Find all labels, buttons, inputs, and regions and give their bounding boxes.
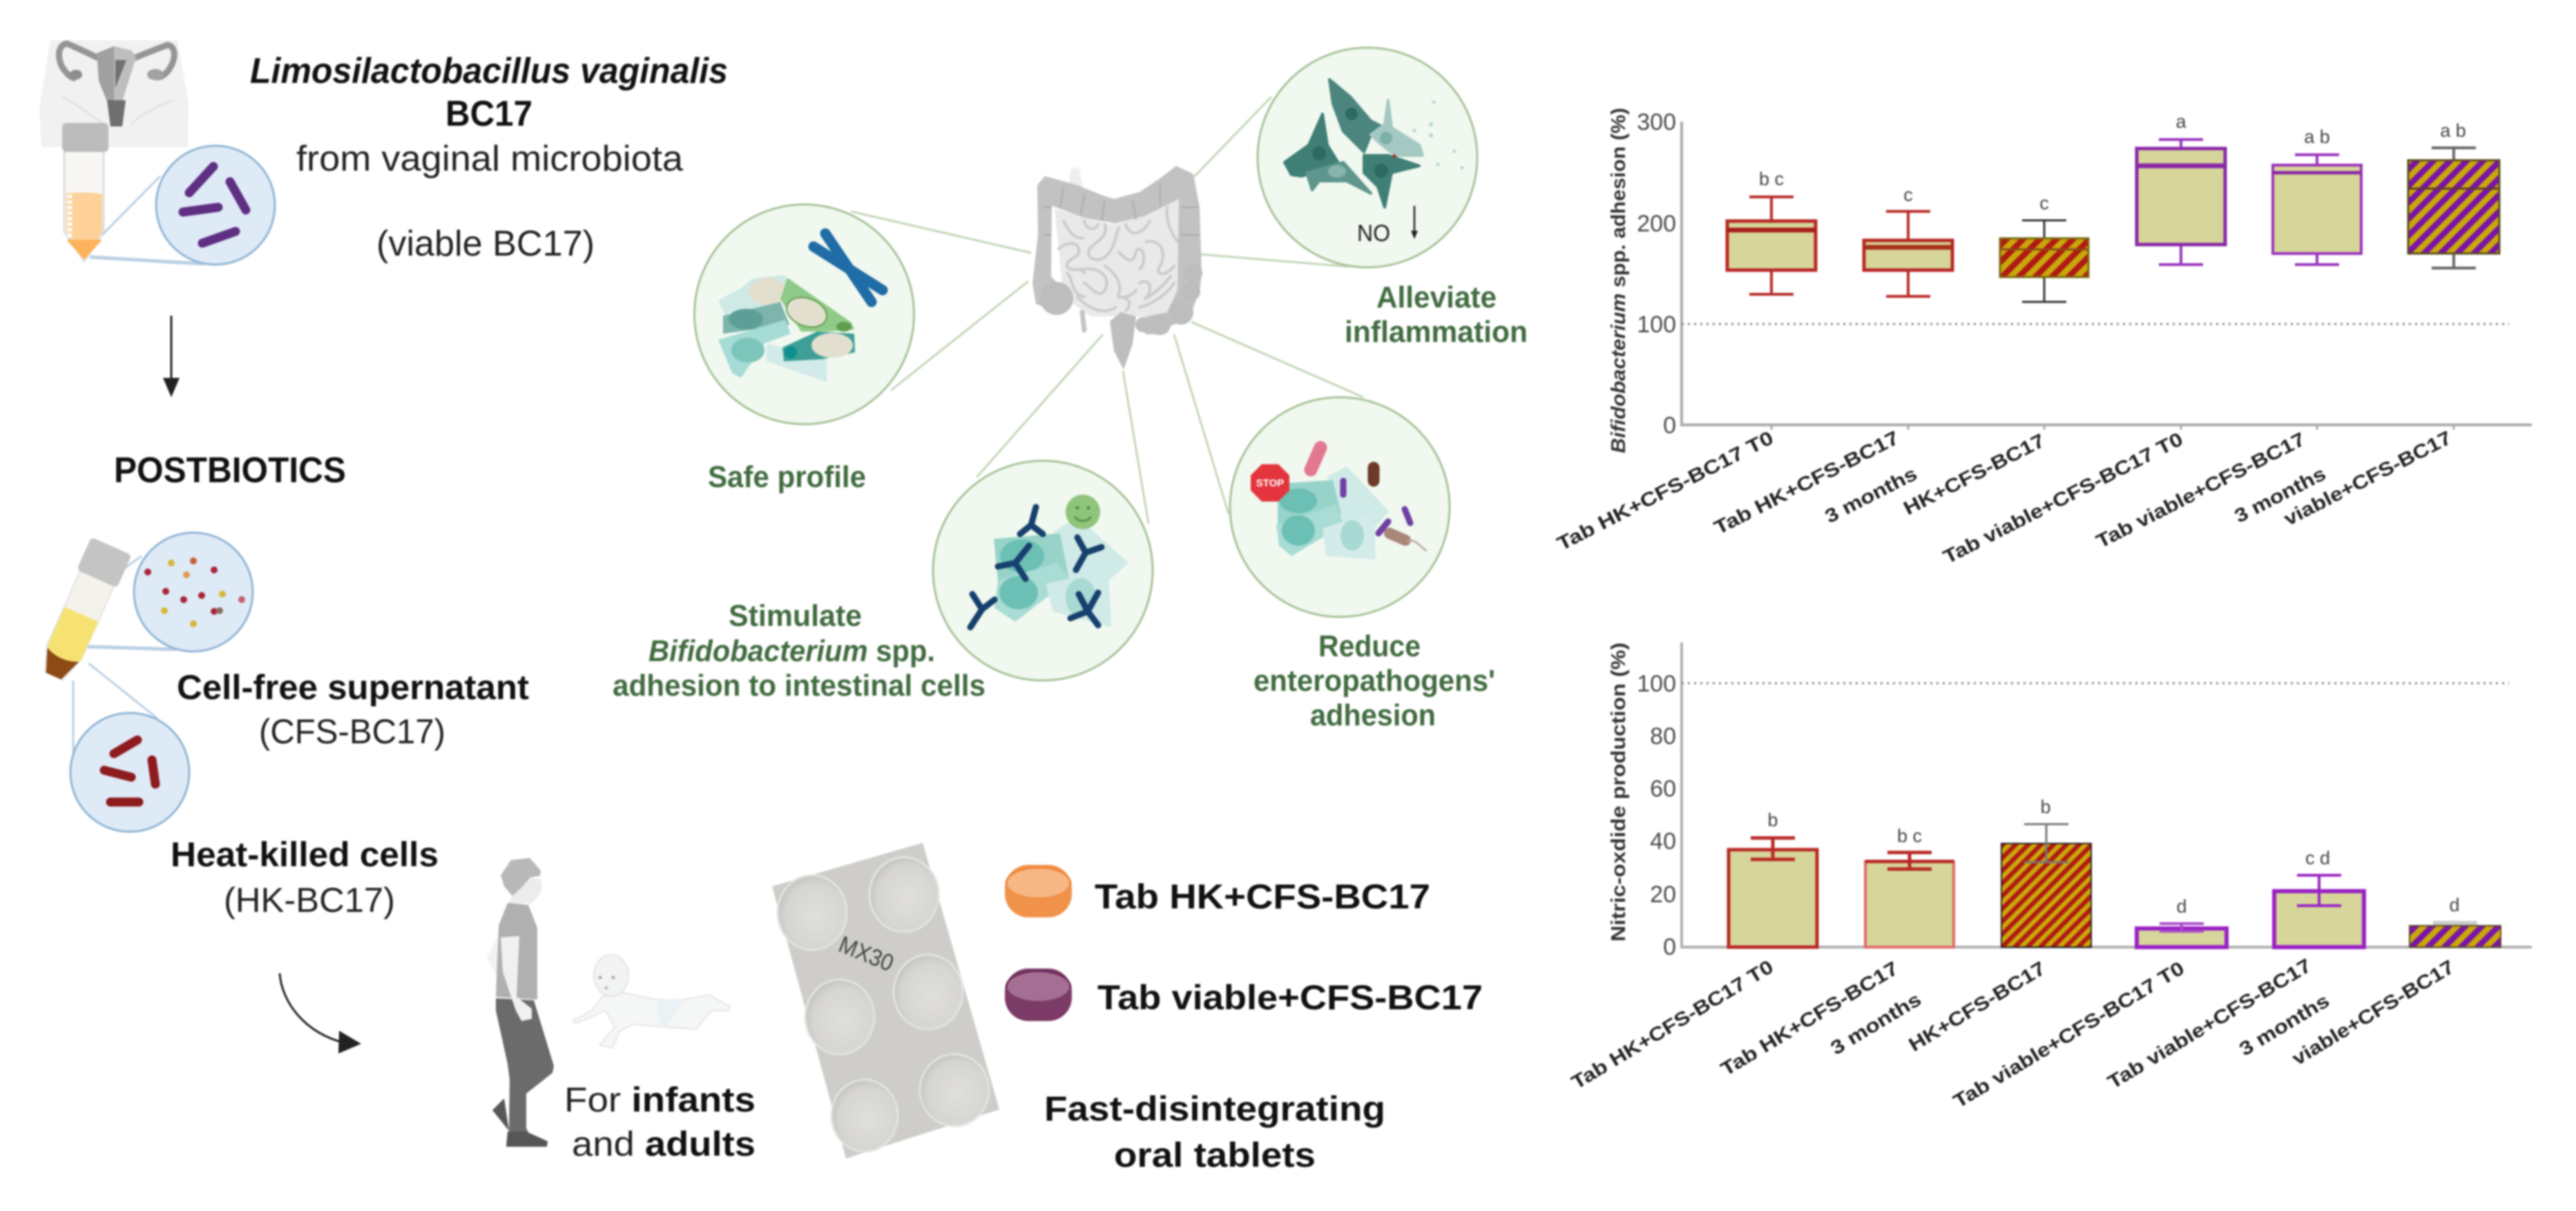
label: reduce enteropathogens adhesion: Reduce [1318,629,1421,663]
significance letters [1767,797,2460,917]
icon: blister pack of tablets [772,843,999,1158]
chart: nitric oxide production bar chart [1568,642,2532,1112]
significance letters: b c [1759,169,1784,189]
significance letters: a [2175,111,2186,132]
panel: safe profile circle [695,204,914,424]
bar: Tab viable+CFS-BC17 T0 [2137,924,2227,947]
significance letters: a b [2440,120,2466,141]
text: cell-free supernatant [177,668,529,751]
x labels: 3 months [2236,990,2333,1060]
legend: Tab HK+CFS-BC17: Tab HK+CFS-BC17 [1095,877,1430,916]
label: safe profile: Safe profile [708,460,866,494]
y axis ticks: 20 [1650,881,1676,908]
text: heat-killed cells [171,835,439,919]
heading: postbiotics: POSTBIOTICS [114,450,346,490]
y axis ticks: 0 [1663,934,1676,960]
title: strain name: BC17 [445,94,532,134]
label: alleviate inflammation [1345,280,1528,349]
bar: Tab HK+CFS-BC17 T0 [1729,838,1817,947]
axes [1682,642,2532,947]
bar: Tab viable+CFS-BC17 3 months [2274,875,2364,947]
significance letters [1759,111,2466,213]
label: reduce enteropathogens adhesion [1253,629,1495,732]
title: strain name: (viable BC17) [376,224,595,264]
label: reduce enteropathogens adhesion: adhesion [1310,698,1436,732]
box: HK+CFS-BC17 [2000,220,2088,302]
icon: stop sign [1251,464,1289,502]
x labels: Tab HK+CFS-BC17 [1717,957,1902,1080]
box: Tab HK+CFS-BC17 T0 [1727,197,1816,294]
bar: Tab HK+CFS-BC17 3 months [1865,852,1954,947]
icon: culture tube orange [62,123,108,261]
y axis ticks: 0 [1663,412,1676,439]
significance letters: b [1767,810,1778,830]
panel: alleviate inflammation circle [1258,48,1477,267]
bar: viable+CFS-BC17 [2410,921,2501,947]
x labels [1568,955,2458,1112]
x labels: Tab viable+CFS-BC17 [2104,955,2315,1093]
icon: tilted supernatant tube [33,537,132,685]
box: viable+CFS-BC17 [2408,148,2499,268]
box: Tab viable+CFS-BC17 3 months [2273,155,2361,265]
text: for infants and adults: For infants [564,1080,756,1119]
icon: pelvis and uterus [39,40,189,147]
label: stimulate bifidobacterium adhesion: Stimulate [729,599,862,633]
icon: stop sign: STOP [1256,477,1284,489]
label: stimulate bifidobacterium adhesion: adhesion to intestinal cells [613,669,986,703]
box: Tab viable+CFS-BC17 T0 [2137,140,2225,265]
box: Tab HK+CFS-BC17 3 months [1864,211,1952,296]
icon: cells [994,517,1128,627]
icon: baby crawling [573,955,730,1048]
icon: smiling bacterium [1066,495,1100,529]
panel: stimulate bifidobacterium circle [933,461,1153,680]
arrow: down to postbiotics [163,316,180,397]
y axis ticks: 60 [1650,776,1676,802]
icon: adult walking [487,858,554,1147]
icon: chromosome [814,233,883,302]
x labels: HK+CFS-BC17 [1900,430,2048,519]
text: cell-free supernatant: Cell-free supernatant [177,668,529,707]
x labels: Tab HK+CFS-BC17 T0 [1568,956,1777,1094]
significance letters: c [1903,184,1913,205]
x labels: Tab viable+CFS-BC17 T0 [1950,957,2188,1112]
icon: magnifier cell-free supernatant [86,533,253,651]
x labels: Tab viable+CFS-BC17 [2093,428,2309,552]
bar: HK+CFS-BC17 [2001,824,2091,947]
icon: magnifier heat-killed cells [70,663,189,832]
icon: intestine [1032,166,1202,370]
y axis ticks: 300 [1637,109,1676,135]
x labels: Tab HK+CFS-BC17 T0 [1553,427,1777,555]
icon: purple tablet [1005,969,1072,1021]
text: NO decrease: NO [1357,220,1390,247]
x labels: viable+CFS-BC17 [2280,427,2455,530]
x labels: HK+CFS-BC17 [1905,957,2049,1056]
label: reduce enteropathogens adhesion: enteropathogens' [1253,664,1495,698]
significance letters: b [2040,797,2051,817]
icon: macrophage cells [1285,79,1423,207]
significance letters: b c [1897,826,1922,846]
chart: bifidobacterium adhesion box plot [1553,108,2532,568]
y axis ticks [1637,671,1676,960]
significance letters: a b [2304,126,2330,147]
text: cell-free supernatant: (CFS-BC17) [259,712,445,751]
y axis ticks: 200 [1637,211,1676,237]
x labels: Tab HK+CFS-BC17 [1711,427,1903,539]
icon: pathogens [1311,448,1426,551]
label: alleviate inflammation: Alleviate [1376,280,1497,314]
y axis ticks: 40 [1650,828,1676,855]
significance letters: d [2449,895,2460,915]
text: heat-killed cells: (HK-BC17) [224,881,395,919]
y axis title: Bifidobacterium spp. adhesion (%) [1608,108,1630,453]
arrow: NO down [1411,206,1418,239]
text: heat-killed cells: Heat-killed cells [171,835,439,874]
x labels: 3 months [1821,463,1921,527]
significance letters: c d [2305,848,2330,868]
label: stimulate bifidobacterium adhesion [613,599,986,703]
text: fast-disintegrating oral tablets: oral tablets [1114,1136,1316,1174]
x labels: viable+CFS-BC17 [2288,956,2458,1069]
panel: reduce enteropathogens circle [1230,397,1450,617]
significance letters: c [2039,193,2049,213]
y axis ticks: 100 [1637,671,1676,697]
y axis title: Nitric-oxdide production (%) [1608,642,1630,942]
y axis ticks: 80 [1650,723,1676,750]
icon: cells [718,275,855,382]
text: fast-disintegrating oral tablets [1044,1089,1385,1174]
text: for infants and adults: and adults [572,1125,756,1163]
title: strain name: from vaginal microbiota [296,139,683,179]
icon: orange tablet [1005,865,1072,917]
icon: blister pack of tablets: MX30 [835,931,897,977]
x labels [1553,427,2455,568]
icon: cells [1276,466,1389,560]
x labels: 3 months [2231,463,2329,527]
icon: antibodies [970,507,1102,627]
y axis ticks: 100 [1637,312,1676,338]
y axis ticks [1637,109,1676,439]
title: strain name [250,51,728,264]
icon: magnifier viable bacteria [90,146,275,265]
title: strain name: Limosilactobacillus vaginalis [250,51,728,91]
legend: Tab viable+CFS-BC17: Tab viable+CFS-BC17 [1097,978,1483,1017]
icon: released particles [1413,101,1464,170]
connector lines from gut to circles [851,97,1363,524]
x labels: Tab viable+CFS-BC17 T0 [1940,428,2186,568]
arrow: curved to consumers [280,973,361,1053]
text: fast-disintegrating oral tablets: Fast-disintegrating [1044,1089,1385,1128]
label: alleviate inflammation: inflammation [1345,315,1528,349]
significance letters: d [2176,896,2187,917]
text: for infants and adults [564,1080,756,1163]
axes [1682,122,2532,425]
label: stimulate bifidobacterium adhesion: Bifidobacterium spp. [648,634,935,668]
x labels: 3 months [1827,989,1925,1059]
